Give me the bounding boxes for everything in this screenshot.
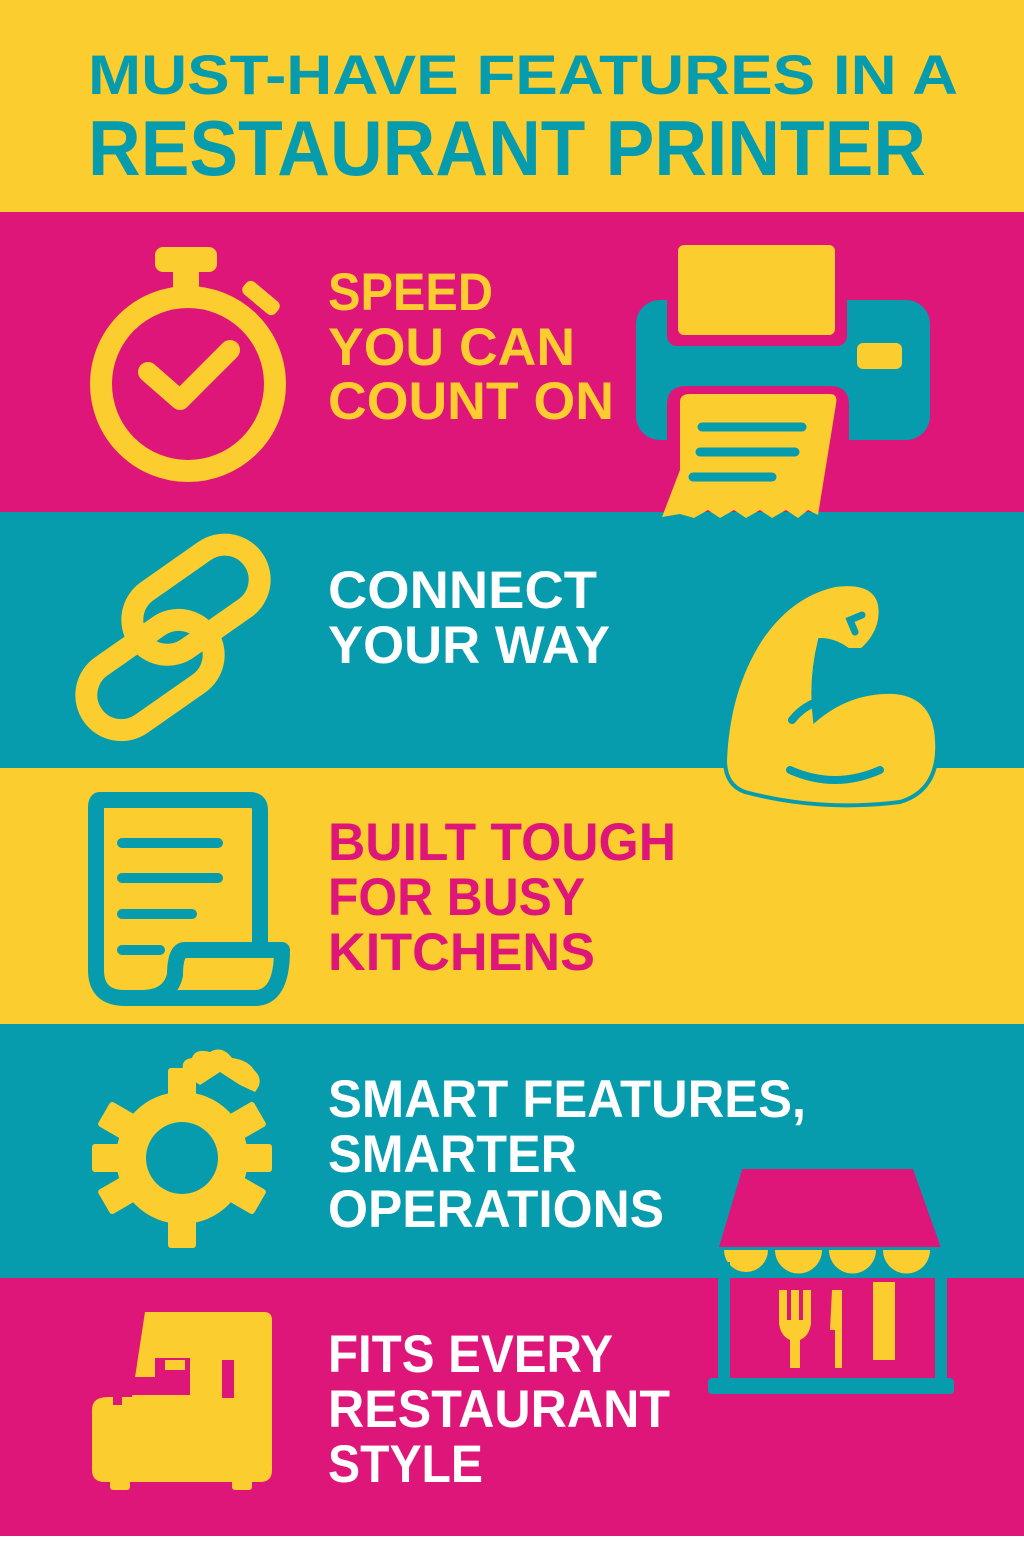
text: speed: SPEED: [328, 263, 493, 322]
title: [88, 43, 958, 192]
text: built tough: [328, 813, 676, 982]
text: built tough: BUILT TOUGH: [328, 813, 676, 872]
text: built tough: FOR BUSY: [328, 868, 585, 927]
text: fits every: RESTAURANT: [328, 1380, 670, 1439]
icon: document: [96, 800, 282, 998]
text: smart features: SMART FEATURES,: [328, 1070, 806, 1129]
text: built tough: KITCHENS: [328, 923, 595, 982]
icon: flexed arm: [725, 584, 937, 805]
text: smart features: [328, 1070, 806, 1239]
text: fits every: STYLE: [328, 1435, 483, 1494]
text: smart features: OPERATIONS: [328, 1180, 664, 1239]
icon: store: [708, 1166, 954, 1394]
title: RESTAURANT PRINTER: [88, 104, 926, 192]
text: smart features: SMARTER: [328, 1125, 577, 1184]
title: MUST-HAVE FEATURES IN A: [88, 43, 958, 106]
icon: food truck: [92, 1312, 272, 1490]
icon: printer: [636, 238, 930, 518]
text: speed: COUNT ON: [328, 372, 614, 431]
icon: gear: [92, 1050, 272, 1248]
text: connect: [328, 561, 610, 675]
text: fits every: [328, 1325, 670, 1494]
text: speed: [328, 263, 614, 431]
text: fits every: FITS EVERY: [328, 1325, 613, 1384]
icon: stopwatch: [101, 247, 282, 471]
icon: link: [73, 531, 273, 744]
text: connect: YOUR WAY: [328, 616, 610, 675]
text: speed: YOU CAN: [328, 318, 575, 377]
text: connect: CONNECT: [328, 561, 597, 620]
